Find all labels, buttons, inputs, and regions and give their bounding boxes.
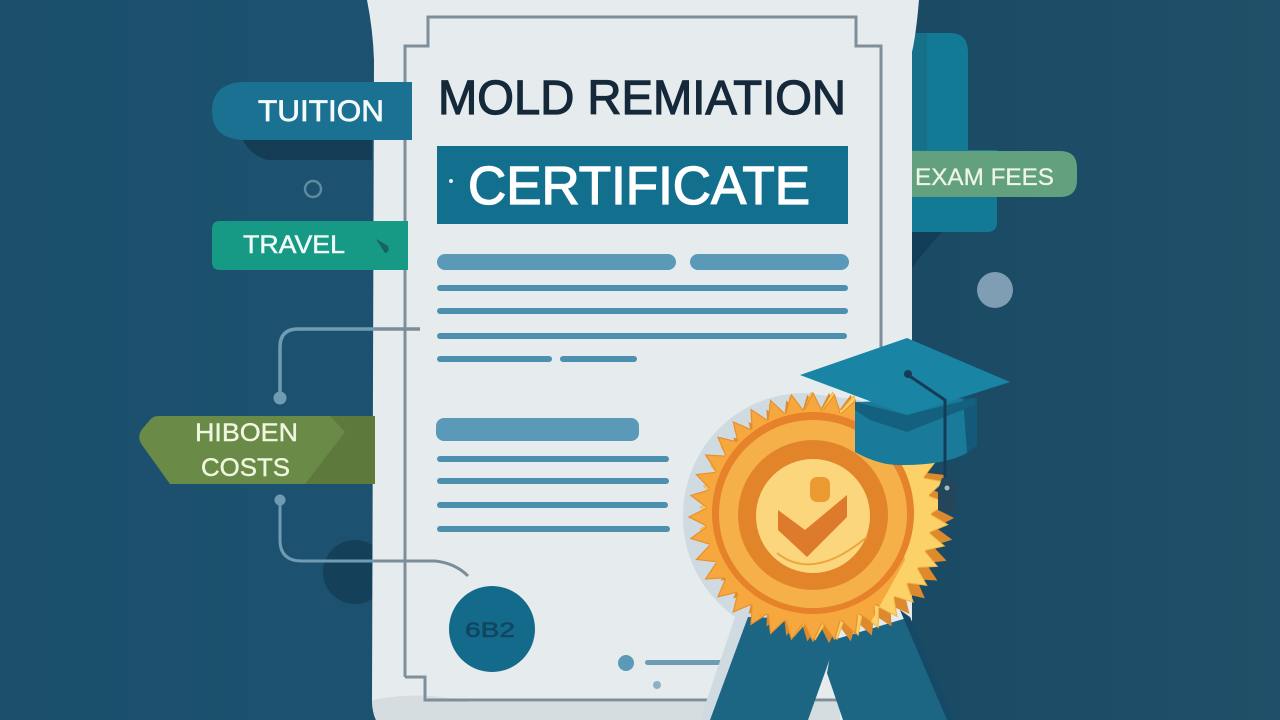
title: MOLD REMIATION — [438, 72, 846, 125]
connector lower — [274, 494, 468, 576]
decorative inner border — [405, 17, 881, 700]
tag: exam fees: EXAM FEES — [915, 164, 1054, 191]
tag: tuition — [212, 82, 412, 140]
tag: hidden costs: COSTS — [201, 454, 290, 482]
certificate paper — [367, 0, 919, 720]
tassel — [938, 478, 957, 513]
tag: exam fees — [912, 151, 1077, 197]
certificate banner — [437, 146, 848, 224]
check mark — [778, 495, 847, 557]
rosette seal — [688, 391, 954, 643]
seal shadow on paper — [683, 393, 880, 720]
graduation cap — [800, 338, 1010, 513]
lower text lines — [436, 418, 670, 532]
paper bottom shading — [373, 695, 840, 720]
stamp circle: 6B2 — [465, 619, 515, 642]
yellow burst layer — [682, 374, 966, 658]
connector upper — [274, 329, 420, 404]
tag: hidden costs: HIBOEN — [195, 419, 298, 447]
stamp circle — [449, 586, 535, 672]
decorative ring left — [305, 181, 321, 197]
decorative circle right — [977, 272, 1013, 308]
tag: hidden costs — [139, 416, 375, 484]
dark circle shadow lower left — [323, 540, 387, 604]
front burst — [688, 392, 905, 642]
banner text: CERTIFICATE — [468, 156, 810, 216]
upper text lines — [437, 254, 849, 362]
small footer marks — [618, 655, 735, 689]
tag: travel: TRAVEL — [243, 231, 345, 259]
back burst — [696, 385, 962, 651]
tag: tuition: TUITION — [258, 95, 384, 128]
tuition tag shadow — [243, 140, 372, 160]
ribbon — [710, 610, 954, 720]
tag: travel — [212, 221, 408, 270]
background decorative shapes right — [905, 33, 997, 268]
